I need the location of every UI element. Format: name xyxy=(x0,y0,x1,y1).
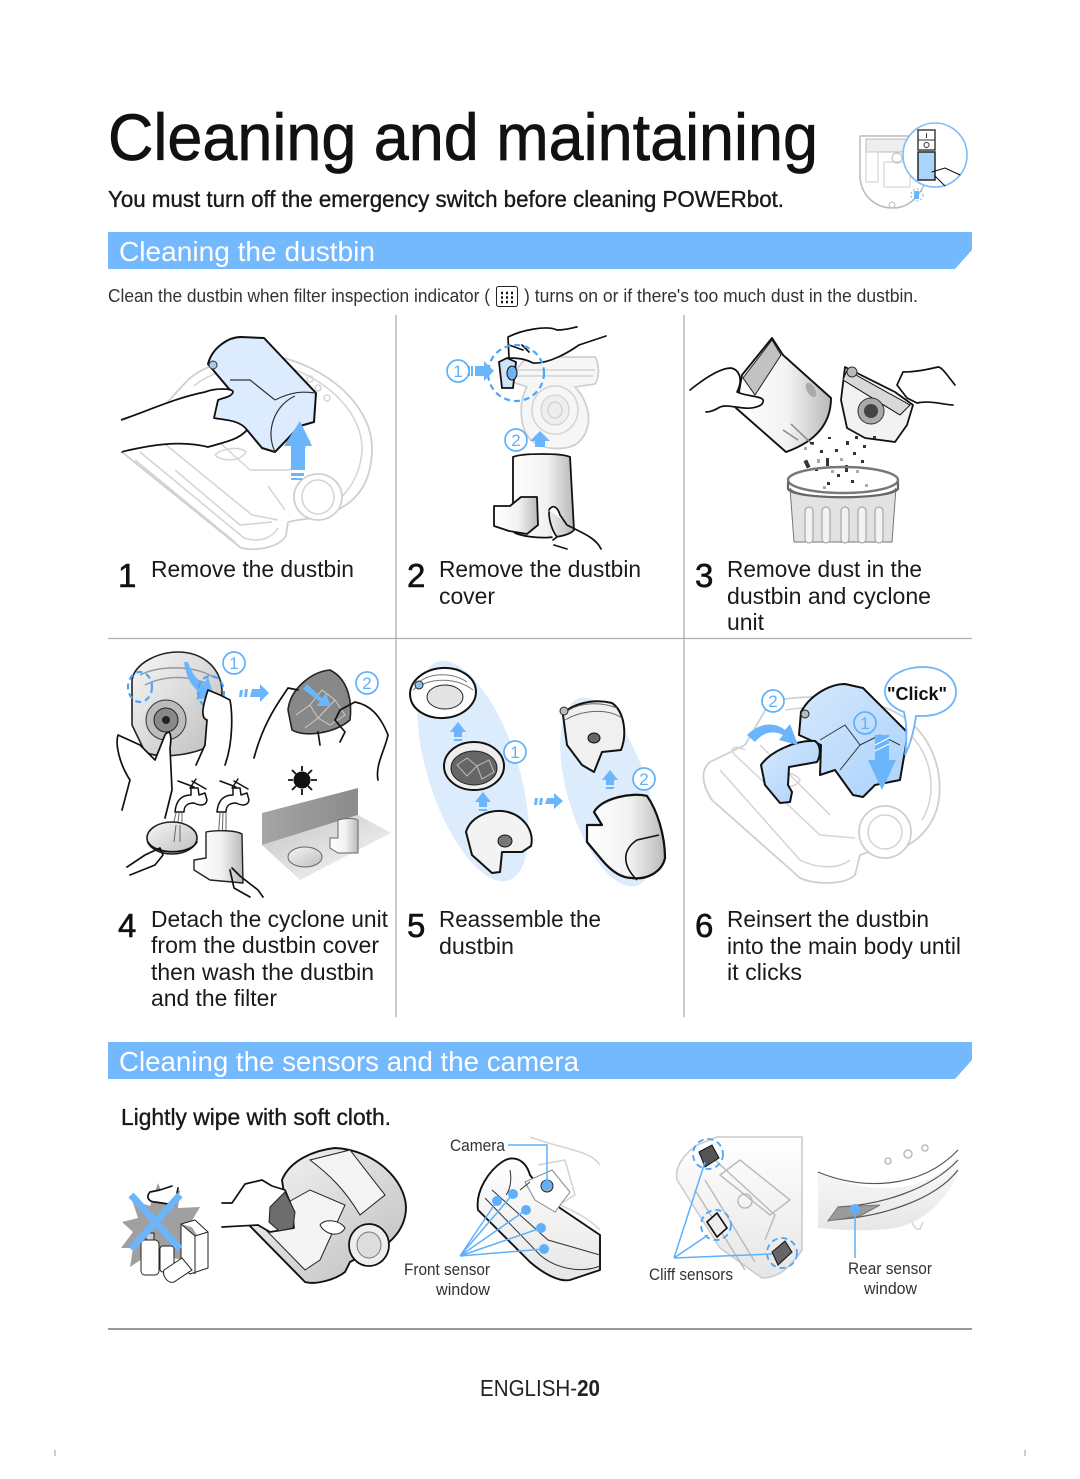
caption: step 2: Remove the dustbin xyxy=(439,556,641,582)
icon: emergency switch on robot xyxy=(860,123,967,208)
illustration: remove the dustbin cover: 1 xyxy=(453,362,463,381)
caption: step 2: cover xyxy=(439,583,495,609)
caption: step 6: into the main body until xyxy=(727,933,961,959)
illustration: remove the dustbin cover: 2 xyxy=(511,431,521,450)
caption: step 5: dustbin xyxy=(439,933,514,959)
illustration: cliff sensors xyxy=(649,1137,802,1284)
illustration: front sensors and camera: Front sensor xyxy=(404,1260,490,1279)
caption: step 3: unit xyxy=(727,609,764,635)
illustration: detach and wash: 1 xyxy=(229,654,239,673)
illustration: detach and wash xyxy=(117,652,391,897)
caption: step 5: 5 xyxy=(407,907,425,944)
illustration: reinsert the dustbin xyxy=(703,667,956,883)
illustration: rear sensor window xyxy=(818,1143,958,1298)
caption: step 4 xyxy=(118,906,388,1011)
faucets xyxy=(175,779,249,812)
subtitle: You must turn off the emergency switch before cleaning POWERbot. xyxy=(108,186,784,212)
illustration: remove the dustbin xyxy=(112,337,372,549)
illustration: reassemble the dustbin: 1 xyxy=(510,743,520,762)
caption: step 4: and the filter xyxy=(151,985,277,1011)
intro text with filter indicator icon: ) turns on or if there's too much dust in the dustbin. xyxy=(524,285,918,306)
caption: step 2: 2 xyxy=(407,557,425,594)
caption: step 6: it clicks xyxy=(727,959,802,985)
caption: step 2 xyxy=(407,556,641,609)
intro text with filter indicator icon xyxy=(108,285,918,306)
illustration: reinsert the dustbin: 2 xyxy=(768,692,778,711)
illustration: rear sensor window: Rear sensor xyxy=(848,1259,932,1278)
caption: step 3: 3 xyxy=(695,557,713,594)
illustration: wiping robot xyxy=(222,1148,406,1283)
section banner: cleaning the dustbin: Cleaning the dustbin xyxy=(119,236,375,267)
caption: step 5 xyxy=(407,906,601,959)
caption: step 6: Reinsert the dustbin xyxy=(727,906,929,932)
illustration: rear sensor window: window xyxy=(863,1279,918,1298)
illustration: reinsert the dustbin: 1 xyxy=(860,714,870,733)
caption: step 6: 6 xyxy=(695,907,713,944)
caption: step 5: Reassemble the xyxy=(439,906,601,932)
caption: step 1: Remove the dustbin xyxy=(151,556,354,582)
caption: step 1 xyxy=(118,556,354,594)
illustration: remove the dustbin cover xyxy=(447,327,606,549)
section banner: cleaning the dustbin xyxy=(108,232,972,269)
illustration: reinsert the dustbin: "Click" xyxy=(887,683,947,704)
section banner: cleaning the sensors and the camera: Cleaning the sensors and the camera xyxy=(119,1046,579,1077)
caption: step 6 xyxy=(695,906,961,985)
illustration: remove dust in the bin xyxy=(690,338,955,543)
intro text with filter indicator icon: Clean the dustbin when filter inspection indicator ( xyxy=(108,285,491,306)
illustration: reassemble the dustbin xyxy=(395,648,675,897)
instruction: lightly wipe: Lightly wipe with soft cloth. xyxy=(121,1104,391,1130)
illustration: reassemble the dustbin: 2 xyxy=(639,770,649,789)
caption: step 1: 1 xyxy=(118,557,136,594)
illustration: front sensors and camera: Camera xyxy=(450,1136,505,1155)
title: Cleaning and maintaining xyxy=(108,100,818,174)
section banner: cleaning the sensors and the camera xyxy=(108,1042,972,1079)
icon: no chemical cleaners xyxy=(121,1183,208,1282)
illustration: front sensors and camera: window xyxy=(435,1280,491,1299)
illustration: detach and wash: 2 xyxy=(362,674,372,693)
caption: step 4: then wash the dustbin xyxy=(151,959,374,985)
caption: step 3: Remove dust in the xyxy=(727,556,922,582)
caption: step 3 xyxy=(695,556,931,635)
caption: step 4: Detach the cyclone unit xyxy=(151,906,388,932)
page number: ENGLISH-20 xyxy=(480,1375,600,1401)
caption: step 4: 4 xyxy=(118,907,136,944)
caption: step 3: dustbin and cyclone xyxy=(727,583,931,609)
illustration: cliff sensors: Cliff sensors xyxy=(649,1265,733,1284)
illustration: front sensors and camera xyxy=(404,1136,600,1299)
caption: step 4: from the dustbin cover xyxy=(151,932,379,958)
